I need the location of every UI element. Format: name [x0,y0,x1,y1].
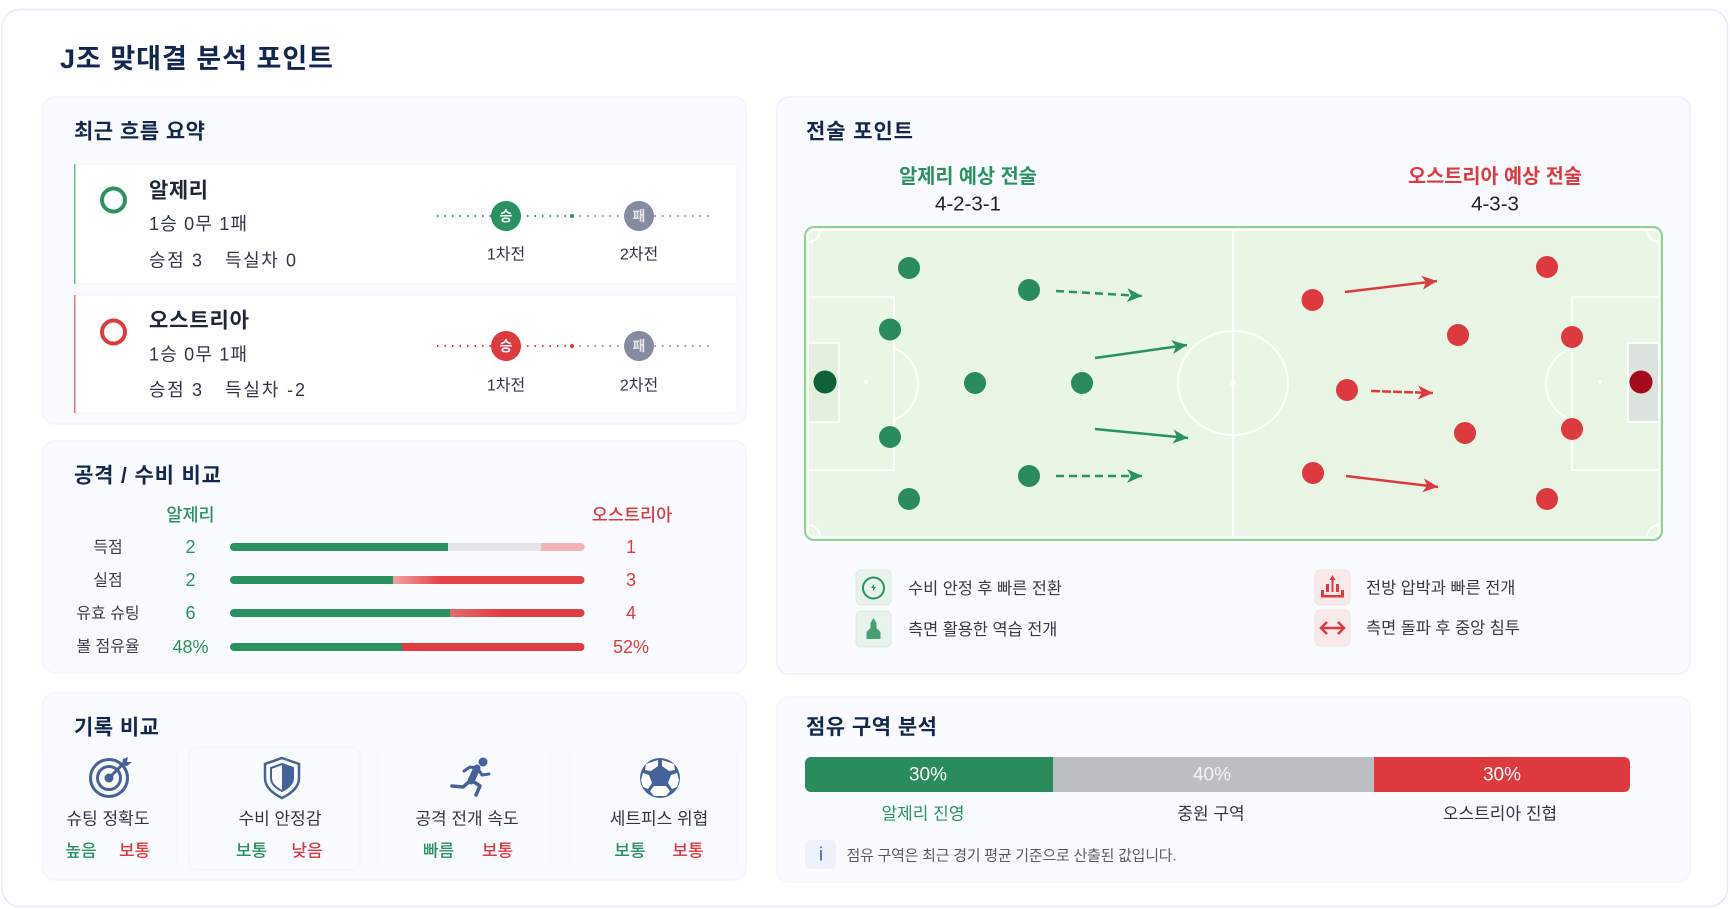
stat: set-piece threat: 보통 [614,842,646,860]
goal difference: Austria: 득실차 -2 [225,380,305,400]
tactics legend: Algeria: 수비 안정 후 빠른 전환 [908,580,1062,598]
heading: attack defence: 공격 / 수비 비교 [74,464,221,488]
note: 점유 구역은 최근 경기 평균 기준으로 산출된 값입니다. [846,848,1176,864]
timeline: Austria: 패 [633,338,645,354]
arrows: Austria [1345,281,1438,487]
icon: soccer ball [640,758,680,798]
zone label: Austria: 오스트리아 진협 [1443,804,1557,824]
timeline: Algeria: 승 [500,208,513,224]
stat: attack tempo: 공격 전개 속도 [415,810,519,828]
points: Austria: 승점 3 [149,380,202,400]
goal difference: Algeria: 득실차 0 [225,250,296,270]
row: shots on target: 4 [626,603,636,623]
stat: shooting accuracy: 높음 [65,842,97,860]
row: possession: 볼 점유율 [76,638,140,656]
timeline: Algeria: 1차전 [487,246,525,264]
timeline: Algeria: 2차전 [620,246,658,264]
stat: defensive stability: 낮음 [291,842,323,860]
arrows: Algeria [1056,291,1188,476]
timeline: Algeria [437,201,710,264]
column header: Austria: 오스트리아 [592,505,672,525]
heading: recent form: 최근 흐름 요약 [74,120,205,144]
stat: set-piece threat: 세트피스 위협 [610,810,708,828]
panel: possession zones [777,697,1690,882]
icon: shield [265,758,299,798]
icon: Austria ring [102,320,125,344]
stat: attack tempo: 보통 [482,842,513,860]
icon: wide counter attack [856,611,891,647]
icon: info [805,840,836,869]
stat: shooting accuracy: 슈팅 정확도 [67,810,149,828]
icon: Algeria ring [102,188,125,212]
timeline: Austria: 1차전 [487,376,525,394]
players: Algeria [814,257,1093,510]
team name: Austria: 오스트리아 [149,310,249,332]
tactics legend: Austria: 전방 압박과 빠른 전개 [1366,580,1515,598]
pitch [805,227,1662,540]
tactics legend: Austria: 측면 돌파 후 중앙 침투 [1366,620,1520,638]
panel: tactics [777,97,1690,674]
heading: tactics: 전술 포인트 [806,120,913,144]
players: Austria [1302,256,1652,510]
timeline: Austria: 2차전 [620,376,658,394]
stat: shooting accuracy: 보통 [119,842,150,860]
row: possession [76,637,649,657]
panel: record comparison [43,693,746,880]
record: Austria: 1승 0무 1패 [149,344,247,364]
icon: info: i [819,844,823,866]
timeline: Austria: 승 [500,338,513,354]
stat: set-piece threat [570,747,737,870]
row: goals conceded [93,570,636,590]
title: J조 맞대결 분석 포인트 [60,44,333,74]
timeline: Austria [437,331,710,394]
subtitle: Austria tactics: 오스트리아 예상 전술 [1408,166,1582,188]
stacked bar: zones [805,757,1630,792]
row: shots on target [76,603,636,623]
row: possession: 48% [172,637,209,657]
panel: recent form summary [43,97,746,424]
row: goals scored: 득점 [93,538,123,556]
icon: runner [452,758,489,795]
stacked bar: zones: 30% [1483,764,1521,786]
heading: possession zones: 점유 구역 분석 [806,716,937,739]
row: goals conceded: 실점 [93,572,123,590]
row: shots on target: 6 [185,603,196,623]
card: Austria [74,295,737,413]
panel: attack and defence comparison [43,441,746,673]
row: possession: 52% [613,637,649,657]
tactics legend: Austria [1315,570,1520,646]
stacked bar: zones: 30% [909,764,947,786]
icon: fast transition [856,570,891,605]
stat: shooting accuracy [43,747,177,870]
subtitle: Algeria tactics: 알제리 예상 전술 [899,166,1037,188]
stat: defensive stability: 수비 안정감 [239,810,322,828]
stat: set-piece threat: 보통 [672,842,704,860]
formation: Algeria: 4-2-3-1 [935,192,1001,216]
team name: Algeria: 알제리 [149,180,208,202]
stat: attack tempo: 빠름 [423,842,454,860]
tactics legend: Algeria [856,570,1062,647]
stat: defensive stability: 보통 [236,842,267,860]
points: Algeria: 승점 3 [149,250,202,270]
zone label: midfield: 중원 구역 [1177,804,1245,824]
tactics legend: Algeria: 측면 활용한 역습 전개 [908,621,1057,639]
row: goals scored: 1 [626,537,636,557]
row: goals scored: 2 [185,537,196,557]
stacked bar: zones: 40% [1193,764,1231,786]
formation: Austria: 4-3-3 [1471,192,1519,216]
row: goals scored [93,537,636,557]
zone label: Algeria: 알제리 진영 [882,804,964,824]
row: shots on target: 유효 슈팅 [76,604,140,622]
stat: defensive stability [189,747,360,870]
timeline: Algeria: 패 [633,208,645,224]
record: Algeria: 1승 0무 1패 [149,214,247,234]
icon: two-way arrow [1315,610,1350,646]
icon: forward press [1315,570,1350,605]
stat: attack tempo [378,747,550,870]
card: Algeria [74,164,737,284]
column header: Algeria: 알제리 [166,505,215,525]
icon: target [90,757,132,796]
row: goals conceded: 3 [626,570,636,590]
row: goals conceded: 2 [185,570,196,590]
heading: record comparison: 기록 비교 [74,716,159,740]
